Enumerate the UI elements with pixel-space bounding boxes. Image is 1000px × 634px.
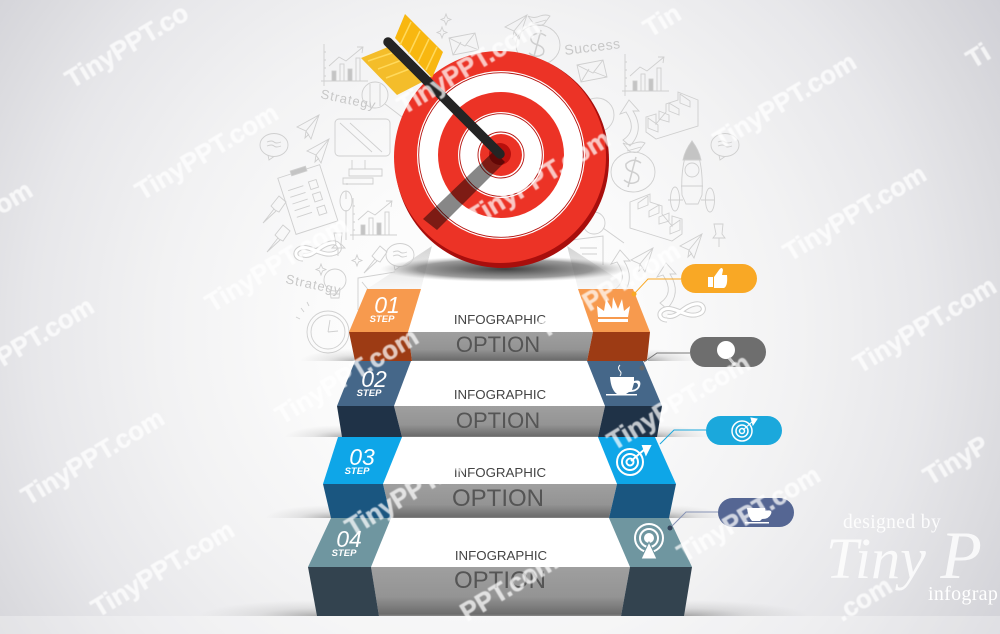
watermarks: TinyPPT.com [392,11,545,120]
step 03 left side [323,484,391,518]
step 03 number: 03 [349,444,375,470]
step 01 number: 01 [374,292,400,318]
doodle: second paper plane [307,139,329,163]
doodle: magnifier right [583,212,624,243]
icon: crown [597,297,630,322]
doodle: speech bubble [260,134,288,160]
step 01 right side [587,332,650,361]
callout connector two [644,353,690,362]
watermarks: TinyPPT.com [602,347,755,456]
step 02 left tab [337,361,411,406]
doodle: paper plane [297,115,319,139]
arrow feather stripes [368,22,437,78]
doodle: clipboard right [572,236,603,265]
floor band [0,616,1000,634]
watermarks: TinyPPT.com [462,123,615,232]
step 03 [323,437,676,518]
step 03 gray riser [383,484,617,518]
arrow upper feather [395,14,443,78]
doodle: star two [316,264,326,275]
arrow [361,14,500,154]
arrow shadow on target [423,151,505,230]
callout connector four [670,512,718,528]
doodle: strategy word top: Strategy [319,86,378,113]
doodle: star one [352,255,362,266]
doodle: small star near arrow [437,27,447,38]
doodle: speech bubble right [711,134,739,160]
step 02 [337,361,662,437]
doodle: clipboard [277,162,338,234]
callout pill four coffee [718,498,794,527]
step 01 left side [349,332,412,361]
watermarks: TinyPPT.com [270,321,423,430]
step 02 gray riser [394,406,605,437]
step 03 white surface [383,437,617,484]
target shadow [380,256,630,282]
target thick edge [395,52,609,268]
step 02 right side [598,406,662,437]
doodle: monitor [335,119,390,184]
ground shadows beside the steps [200,349,809,616]
watermarks: TinyP [918,429,993,491]
watermarks: Ti [961,37,995,74]
doodle: envelope right [577,60,607,82]
step 02 white surface [394,361,605,406]
stair top light cones [367,246,633,289]
step 03 right side [609,484,676,518]
watermarks: TinyPPT.com [86,514,239,623]
step 04 number: 04 [336,526,362,552]
step 02 number: 02 [361,366,387,392]
doodle: bar chart right [622,54,669,96]
doodle: stairs top [646,92,698,139]
watermarks: TinyPPT.com [200,209,353,318]
designer signature [826,512,998,605]
step 01 option text: OPTION [456,332,540,357]
step 04 [308,518,692,616]
step 04 left tab [308,518,391,567]
callout connector three [660,430,706,444]
doodle: clock [296,302,349,353]
doodle: pin two [267,225,290,252]
doodle: infinity right [660,304,703,320]
watermarks: TinyPPT.co [60,0,194,94]
doodle: success word: Success [563,35,621,58]
icon: broadcast tower [635,524,663,559]
callout pill three target [706,416,782,445]
doodle: light bulb [324,269,346,298]
doodle: arrow by thumb pill [657,263,676,309]
doodle: clock partly hidden [580,98,614,132]
callout dot two [640,366,644,370]
icon: coffee cup [606,365,640,396]
doodle: money bag right [611,142,655,192]
step 04 infographic text: INFOGRAPHIC [455,548,548,563]
callout dot four [668,526,672,530]
doodle: paper plane top [505,15,527,39]
step 03 left tab [323,437,402,484]
doodle: stars near arrow [441,14,451,25]
signature designed by: designed by [843,512,941,533]
step 04 white surface [371,518,630,567]
step 01 left tab [349,289,421,332]
callout pill one thumbs up [681,264,757,293]
doodle: stairs lower [630,194,682,241]
target rings [394,51,606,263]
step 01 right tab [578,289,650,332]
doodle: pin four [364,246,387,273]
doodle: curved arrow [620,100,639,146]
doodle: bar chart left lower [350,198,397,240]
watermarks: TinyPPT.com [130,97,283,206]
watermarks: .com [830,570,897,627]
step 04 gray riser [371,567,630,616]
doodle: strategy word lower: Strategy [284,271,343,298]
doodle: arrow lower [611,250,630,296]
step 04 right side [621,567,692,616]
step 03 infographic text: INFOGRAPHIC [454,465,547,480]
doodle: rocket [668,141,714,212]
step 02 step label: STEP [357,388,382,399]
doodle: magnifier [362,82,402,117]
watermarks: TinyPPT.com [778,158,931,267]
doodle: envelope top [449,33,479,55]
doodle: plane right [680,234,702,258]
signature infographic word: infograp [928,583,998,605]
step 04 option text: OPTION [454,567,546,594]
watermarks: TinyPPT.com [532,235,685,344]
callout dot one [632,292,636,296]
doodle: bar chart left top [321,44,368,86]
step 02 option text: OPTION [456,408,540,433]
step 04 right tab [609,518,692,567]
step 02 infographic text: INFOGRAPHIC [454,387,547,402]
doodle: infinity [296,243,339,259]
watermarks: TinyPPT.com [672,459,825,568]
doodle: pin one [263,196,286,223]
doodle: speech bubble lower [386,244,414,270]
doodle sketches cluster [260,14,739,353]
step 02 left side [337,406,402,437]
step 03 option text: OPTION [452,485,544,512]
doodle: money bag top [516,15,560,65]
doodle: picture frame [358,272,395,310]
step 02 right tab [587,361,662,406]
step 01 step label: STEP [370,314,395,325]
arrow lower feather [361,47,430,95]
watermarks: TinyPPT.com [16,402,169,511]
step 04 step label: STEP [332,548,357,559]
watermarks: TinyPPT.com [708,46,861,155]
doodle: pin right [713,224,725,247]
watermarks: TinyPPT.com [340,433,493,542]
doodle: large plane [631,248,653,272]
step 03 right tab [598,437,676,484]
step 01 gray riser [408,332,593,361]
watermarks: PPT.com [455,546,563,627]
callouts [632,264,794,530]
doodle: pin three [332,233,345,256]
step 01 white surface [408,246,593,332]
arrow shaft [388,42,500,154]
step 03 step label: STEP [345,466,370,477]
doodle: computer mouse [340,183,352,240]
icon: target with arrow [617,446,650,475]
target board [394,51,609,268]
callout connector one [634,279,681,294]
callout pill two magnifier [690,337,766,367]
step 01 [349,246,650,361]
step 04 left side [308,567,379,616]
step 01 infographic text: INFOGRAPHIC [454,312,547,327]
signature script name: Tiny P [826,517,982,593]
watermarks: TinyPPT.com [848,270,1000,379]
